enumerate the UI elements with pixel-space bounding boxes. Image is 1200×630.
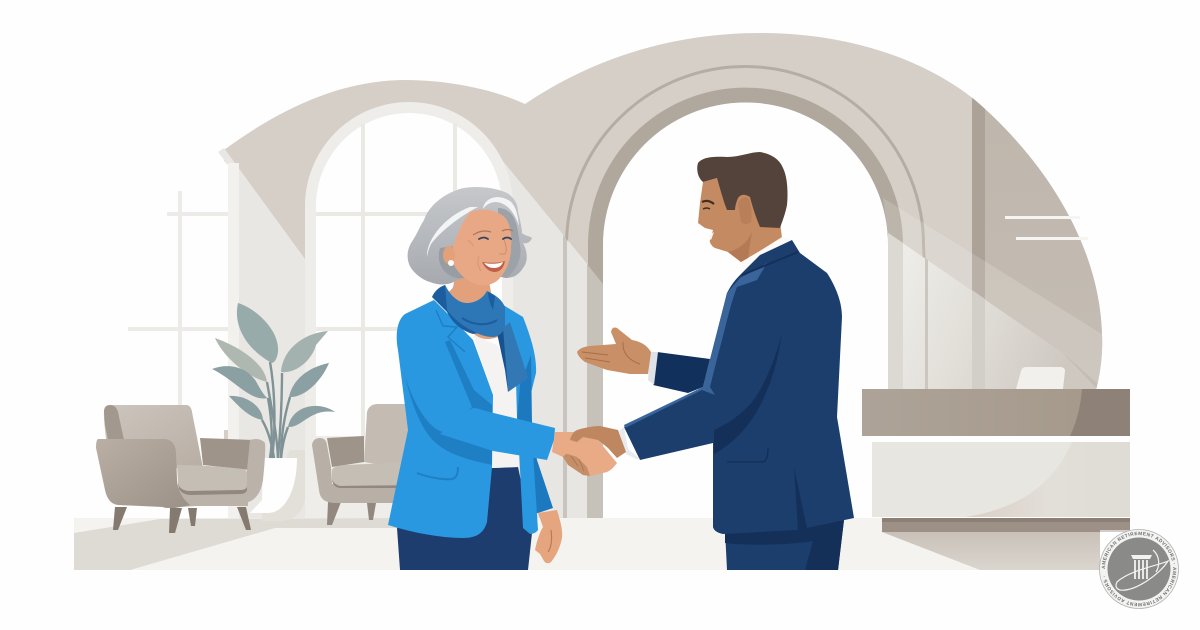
extended hand: [577, 328, 651, 374]
inner back panel: [200, 438, 254, 470]
earring: [448, 260, 454, 266]
trousers: [725, 520, 844, 570]
inner panel: [327, 436, 364, 467]
hair back: [408, 187, 532, 284]
wall ledges: [1005, 216, 1088, 240]
scarf main: [445, 285, 505, 337]
hair streaks: [427, 207, 478, 257]
large arch: [563, 67, 925, 518]
lapel line: [436, 310, 465, 352]
seat: [332, 462, 410, 486]
arm and base: [312, 438, 400, 503]
logo backing: [1100, 530, 1130, 570]
woman's hand: [552, 432, 617, 476]
scarf dark fold: [432, 285, 485, 334]
handshake: [552, 426, 626, 476]
pot: [250, 458, 297, 513]
smile lines: [468, 240, 481, 271]
man's hand: [570, 426, 626, 458]
collar shade: [742, 252, 798, 275]
sunlit wall between window and arch: [484, 138, 602, 518]
pocket: [727, 448, 768, 462]
knuckles: [563, 454, 590, 476]
nose: [499, 240, 506, 254]
legs: [327, 502, 341, 525]
face: [452, 210, 511, 285]
white blouse: [473, 335, 520, 468]
jacket body: [624, 240, 854, 534]
small white chair behind desk: [1016, 367, 1065, 389]
lapel crease: [445, 340, 492, 418]
collar: [741, 237, 792, 272]
pocket: [417, 467, 458, 479]
leaves: [237, 303, 278, 363]
centre arched window: [305, 102, 513, 518]
ring text: AMERICAN RETIREMENT ADVISORS · AMERICAN RETIREMENT ADVISORS ·: [1102, 532, 1176, 606]
stems: [262, 362, 290, 458]
scarf tail: [503, 322, 528, 392]
diagonal light beams on right wall: [883, 198, 1105, 392]
eye: [703, 208, 710, 209]
woman: [388, 187, 562, 570]
far cuff: [648, 352, 658, 385]
eyebrow: [702, 201, 714, 204]
hair: [697, 152, 788, 228]
hair shadow: [439, 245, 464, 278]
eyebrows: [473, 230, 513, 235]
blazer shadow: [405, 375, 492, 465]
man: [577, 152, 854, 570]
plant: [212, 303, 335, 521]
front arm: [96, 439, 190, 508]
neck: [728, 190, 782, 262]
ear: [738, 197, 752, 224]
sunlit wall left: [218, 148, 313, 518]
pot shadow: [262, 450, 305, 521]
logo seal: [1099, 529, 1179, 609]
right armchair: [312, 404, 415, 525]
mouth: [482, 261, 505, 272]
trousers: [397, 467, 532, 570]
reception desk: [862, 389, 1138, 519]
floor: [74, 518, 1130, 570]
left window: [128, 153, 228, 431]
jaw shadow: [728, 232, 752, 262]
near sleeve: [440, 408, 555, 460]
right arm and base: [165, 439, 265, 508]
back: [364, 404, 415, 470]
column emblem: [1116, 550, 1168, 590]
back wall with arches: [224, 30, 1115, 450]
jacket shoulder highlight: [624, 263, 767, 428]
eyes: [479, 238, 511, 239]
ear: [443, 246, 455, 264]
back: [104, 405, 203, 468]
seat cushion: [177, 465, 247, 491]
blazer right front: [495, 300, 536, 424]
front flap: [519, 450, 538, 534]
far sleeve: [524, 420, 553, 515]
neck: [448, 265, 498, 339]
blazer left front: [388, 300, 493, 538]
face: [698, 178, 780, 262]
left armchair: [96, 405, 265, 533]
jacket dark fold: [714, 332, 782, 454]
legs: [113, 507, 127, 530]
near cuff: [619, 427, 640, 459]
mouth: [708, 232, 714, 240]
far arm: [653, 352, 710, 393]
lower hand: [535, 510, 562, 563]
scarf tail dark: [497, 326, 508, 392]
vent: [794, 467, 807, 530]
